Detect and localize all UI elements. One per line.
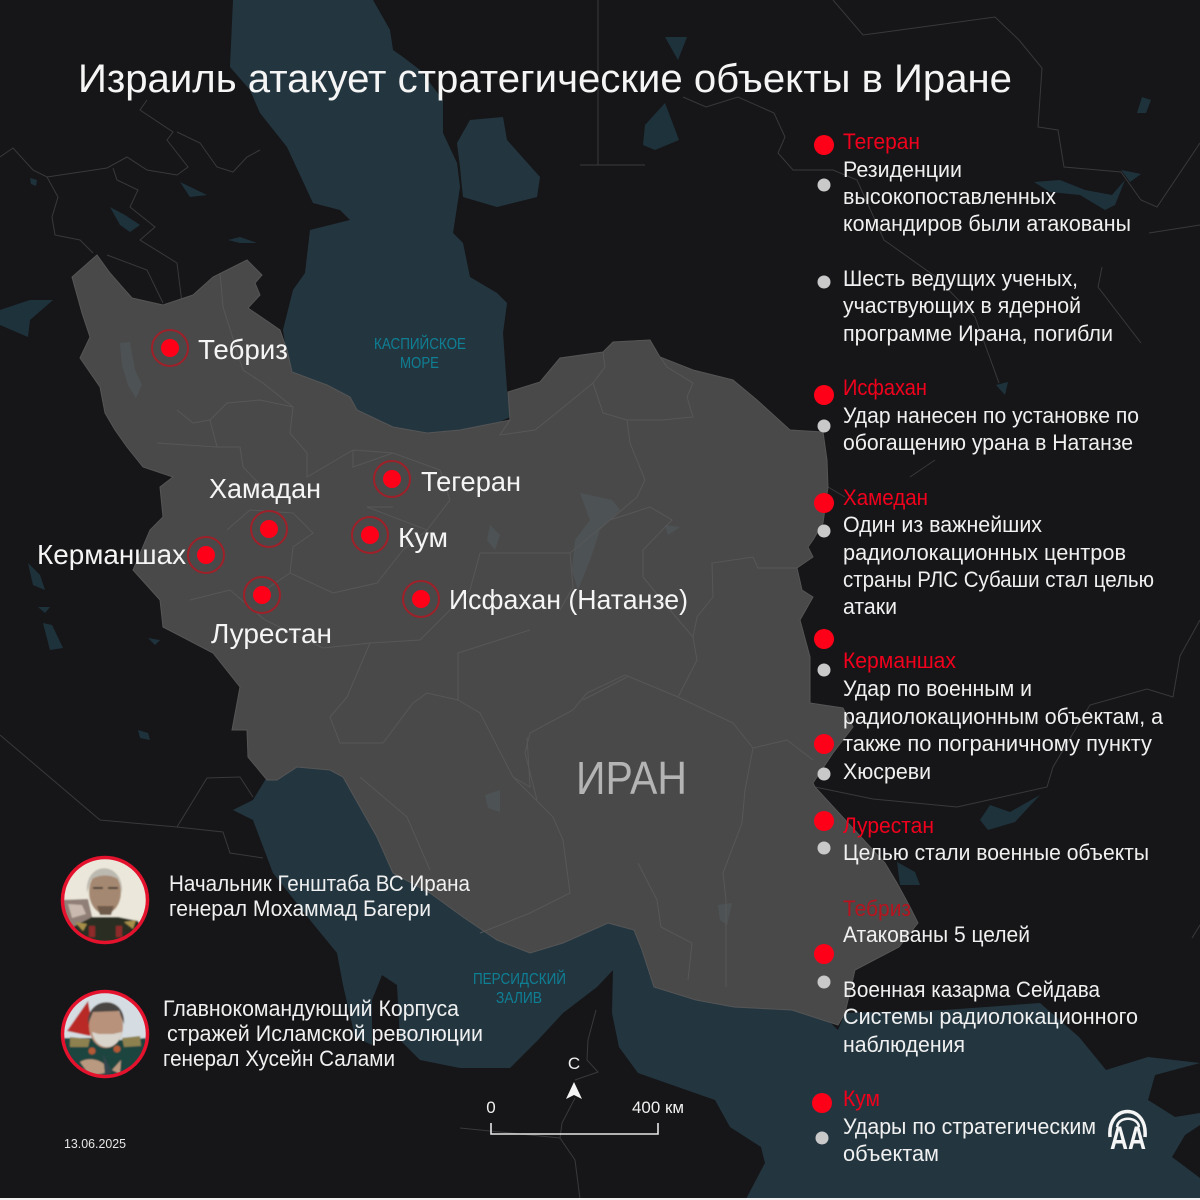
caption: Салами [163,996,483,1071]
small lakes [0,37,1151,885]
date: 13.06.2025 [64,1137,126,1151]
map marker: Хамадан: Хамадан [209,473,321,504]
sea label: Persian Gulf: ПЕРСИДСКИЙ [473,970,566,988]
list item: Лурестан [814,811,1149,865]
map marker: Лурестан [211,577,332,649]
map marker: Тебриз [152,330,288,366]
list item: Тегеран: программе Ирана, погибли [843,321,1113,346]
list item: Керманшах: радиолокационным объектам, а [843,704,1164,729]
list item: Исфахан: Удар нанесен по установке по [843,403,1139,428]
list item: Лурестан: Лурестан [843,813,934,838]
list item: Исфахан: Исфахан [843,375,927,400]
list item: Керманшах: также по пограничному пункту [843,731,1152,756]
list item: Керманшах: Удар по военным и [843,676,1032,701]
list item: Керманшах [814,629,1164,784]
list item: Тегеран: высокопоставленных [843,184,1056,209]
list item: Хамедан: Хамедан [843,485,928,510]
map marker: Лурестан: Лурестан [211,618,332,649]
list item: Кум: Кум [843,1086,880,1111]
list item: Исфахан: обогащению урана в Натанзе [843,430,1133,455]
portrait: Салами [60,990,150,1080]
list item: Тегеран [814,129,1131,346]
scale bar [486,1098,684,1134]
scale bar: 400 км [632,1098,684,1117]
salt lakes and inland water [120,342,732,925]
province borders [157,273,813,987]
list item: Исфахан [814,375,1139,455]
list item: Лурестан: Целью стали военные объекты [843,840,1149,865]
list item: Тебриз: Системы радиолокационного [843,1004,1138,1029]
map marker: Кум [352,517,448,553]
list item: Хамедан: страны РЛС Субаши стал целью [843,567,1154,592]
sea label: Caspian: МОРЕ [400,355,439,372]
list item: Хамедан [814,485,1154,619]
north arrow: С [568,1054,580,1073]
logo: AA [1110,1112,1146,1156]
map marker: Исфахан (Натанзе) [403,581,688,617]
list item: Тебриз: Тебриз [843,896,911,921]
map marker: Кум: Кум [398,522,448,553]
sea label: Persian Gulf: ЗАЛИВ [496,990,542,1007]
list item: Хамедан: Один из важнейших [843,512,1042,537]
country label: Iran: ИРАН [576,752,687,804]
Iran territory [72,255,918,1025]
map marker: Тегеран: Тегеран [421,466,521,497]
list item: Тебриз: Военная казарма Сейдава [843,977,1101,1002]
list item: Кум [812,1086,1096,1166]
list item: Тебриз: Атакованы 5 целей [843,922,1030,947]
list item: Тегеран: участвующих в ядерной [843,293,1081,318]
caption: Салами: генерал Хусейн Салами [163,1046,395,1071]
list item: Тегеран: Резиденции [843,157,962,182]
list item: Кум: Удары по стратегическим [843,1114,1096,1139]
north arrow [566,1054,582,1099]
list item: Кум: объектам [843,1141,939,1166]
map: Iran [72,255,918,1025]
sea: Kara-Bogaz [457,117,540,207]
map marker: Тегеран [374,461,521,497]
list item: Тегеран: Шесть ведущих ученых, [843,266,1078,291]
map marker: Исфахан (Натанзе): Исфахан (Натанзе) [449,584,688,615]
list item: Тебриз: наблюдения [843,1032,965,1057]
caption: Салами: Главнокомандующий Корпуса [163,996,460,1021]
map marker: Керманшах [37,537,224,573]
sea: Caspian [230,0,510,440]
sea label: Caspian: КАСПИЙСКОЕ [374,335,466,353]
list item: Керманшах: Хюсреви [843,759,931,784]
list: strike descriptions [812,129,1164,1166]
caption: Салами: стражей Исламской революции [167,1021,483,1046]
list item: Хамедан: радиолокационных центров [843,540,1126,565]
list item: Тебриз [814,896,1138,1057]
caption: Багери [169,871,471,921]
caption: Багери: генерал Мохаммад Багери [169,896,431,921]
list item: Тегеран: командиров были атакованы [843,211,1131,236]
sea label: Persian Gulf [473,970,566,1007]
logo: AA: AA [1110,1120,1146,1156]
sea label: Caspian [374,335,466,372]
list item: Керманшах: Керманшах [843,648,956,673]
list item: Тегеран: Тегеран [843,129,920,154]
title: Израиль атакует стратегические объекты в Иране [78,57,1012,101]
map marker: Тебриз: Тебриз [198,334,288,365]
map marker: Керманшах: Керманшах [37,539,186,570]
caption: Багери: Начальник Генштаба ВС Ирана [169,871,471,896]
scale bar: 0 [486,1098,496,1117]
sea: Persian Gulf and Gulf of Oman [233,755,1200,1199]
portrait: Багери [60,855,150,945]
list item: Хамедан: атаки [843,594,897,619]
map marker: Хамадан [209,473,321,547]
